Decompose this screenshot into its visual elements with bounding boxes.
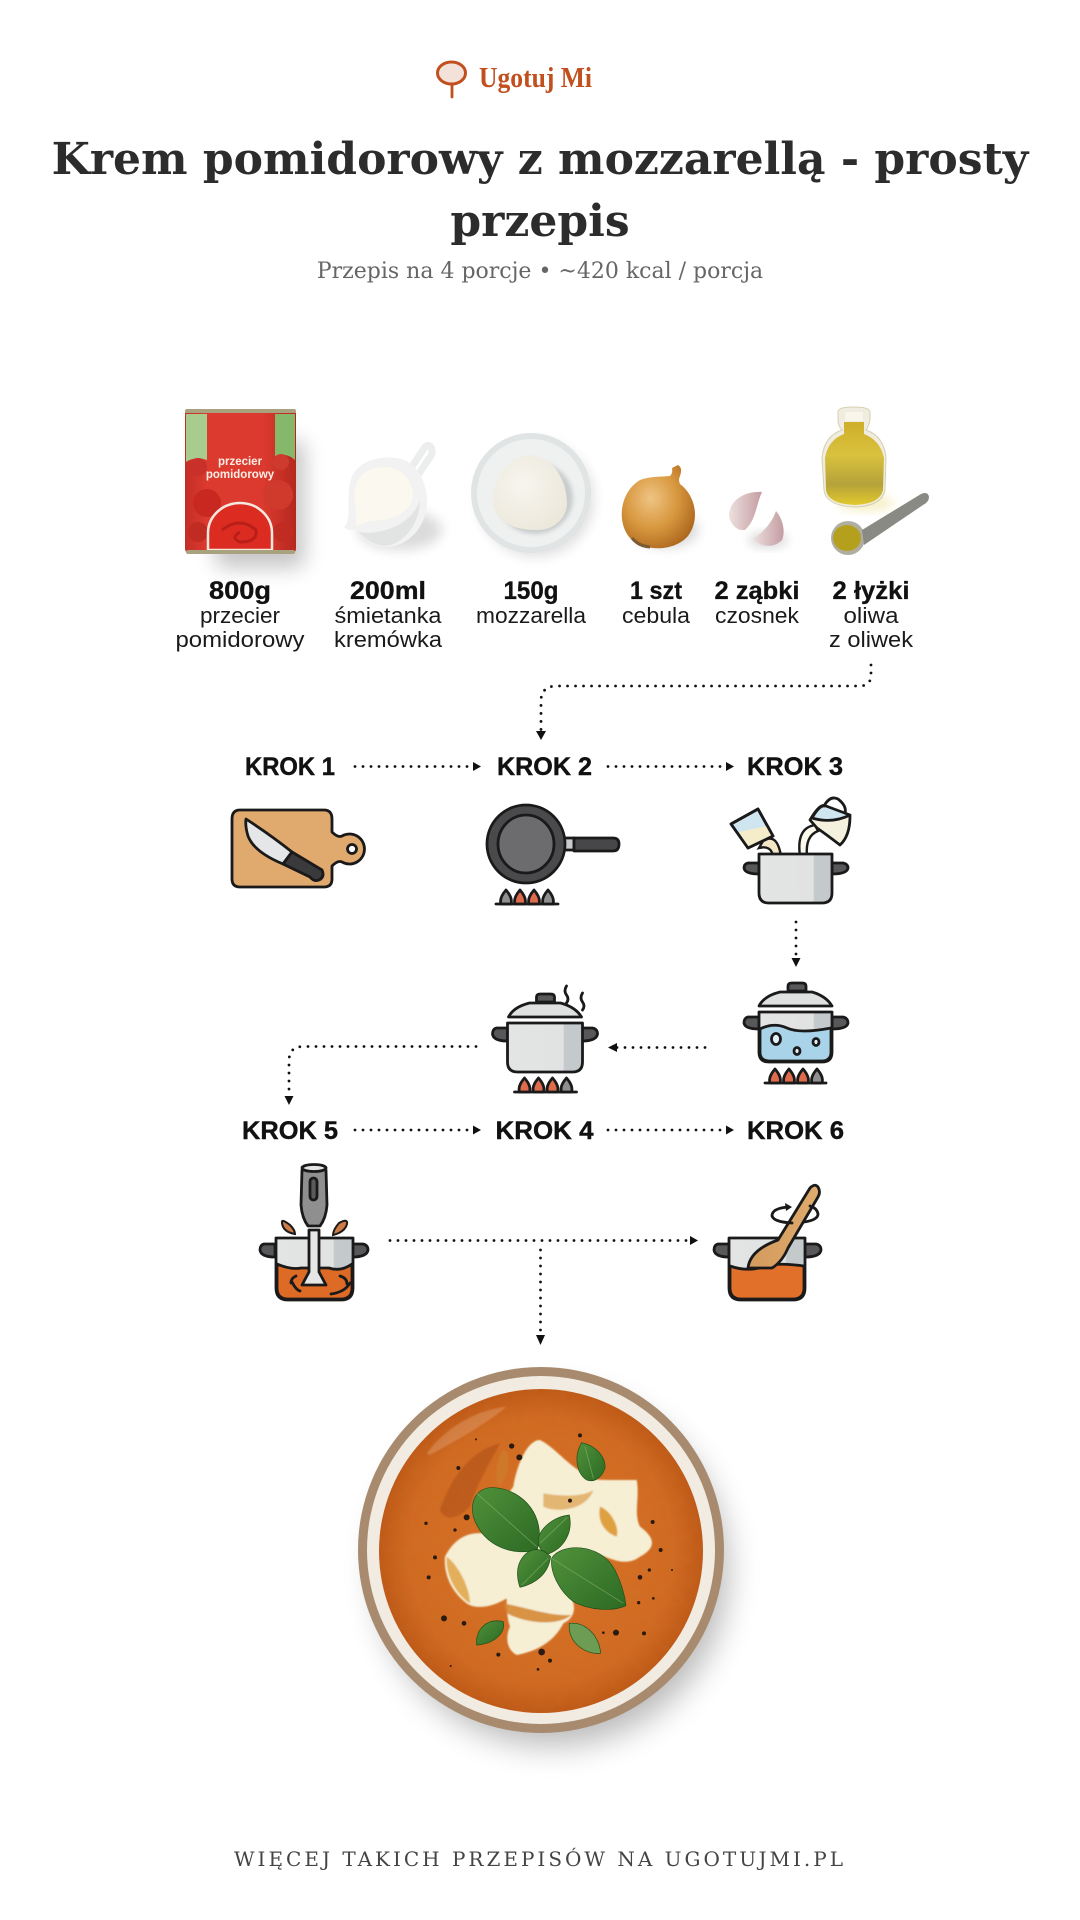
ingredient: onion xyxy=(622,465,698,548)
arrow: down to finished soup xyxy=(536,1250,545,1345)
icon: covered simmering pot xyxy=(492,986,598,1092)
arrow: step 4 to 6 xyxy=(608,1126,734,1134)
pot body xyxy=(744,863,848,874)
label: 2 ząbki: czosnek xyxy=(715,603,800,628)
mozzarella and basil xyxy=(424,1407,673,1671)
footer: WIĘCEJ TAKICH PRZEPISÓW NA UGOTUJMI.PL xyxy=(234,1846,846,1871)
ingredient: tomato passata can xyxy=(185,409,305,568)
ingredient: olive oil bottle and spoon xyxy=(822,407,929,555)
mozzarella xyxy=(445,1440,652,1655)
label: 800g: 800g xyxy=(209,577,271,605)
basil leaves xyxy=(472,1443,626,1653)
label: 1 szt: cebula xyxy=(622,603,691,628)
arrow: blender to stir pot xyxy=(390,1236,698,1245)
label: 150g xyxy=(476,577,587,628)
arrow: step 2 to 3 xyxy=(608,762,734,771)
arrow: simmer to step 5 xyxy=(284,1046,476,1105)
heading: KROK 3: KROK 3 xyxy=(747,753,843,781)
arrow: step 5 to 4 xyxy=(355,1126,481,1134)
ingredient: tomato passata can: przecier xyxy=(218,456,263,468)
heading: KROK 6: KROK 6 xyxy=(747,1117,844,1145)
burner flames xyxy=(496,890,558,904)
title: Krem pomidorowy z mozzarellą - prosty xyxy=(52,134,1030,185)
black pepper xyxy=(424,1433,673,1671)
heading: KROK 1: KROK 1 xyxy=(245,753,335,781)
label: 150g: mozzarella xyxy=(476,603,587,628)
ingredient labels xyxy=(176,577,914,652)
bowl shadow xyxy=(376,1394,728,1746)
heading: KROK 5: KROK 5 xyxy=(242,1117,338,1145)
burner flames xyxy=(514,1078,576,1092)
arrow: step 1 to 2 xyxy=(355,762,481,771)
label: 2 łyżki: z oliwek xyxy=(829,627,914,652)
label: 2 łyżki: 2 łyżki xyxy=(832,577,910,605)
ingredient: tomato passata can: pomidorowy xyxy=(206,469,275,481)
label: 2 łyżki: oliwa xyxy=(844,603,899,628)
logo wordmark: Ugotuj Mi xyxy=(479,62,592,94)
label: 1 szt: 1 szt xyxy=(630,577,683,605)
ingredient: mozzarella on plate xyxy=(471,433,594,557)
label: 2 łyżki xyxy=(829,577,914,652)
arrow: boiling to simmer xyxy=(608,1043,705,1052)
heading: KROK 2: KROK 2 xyxy=(497,753,592,781)
icon: cutting board with knife xyxy=(232,810,364,887)
heading: KROK 4: KROK 4 xyxy=(496,1117,594,1145)
label: 200ml: śmietanka xyxy=(334,603,442,628)
arrow: step 3 down to boiling xyxy=(792,922,800,967)
title: przepis xyxy=(450,196,630,247)
soup xyxy=(379,1389,703,1713)
finished soup bowl xyxy=(358,1367,728,1746)
label: 200ml xyxy=(334,577,443,652)
icon: boiling water pot xyxy=(744,983,848,1083)
label: 2 ząbki xyxy=(714,577,800,628)
arrow: ingredients to step 2 xyxy=(536,665,871,740)
label: 2 ząbki: 2 ząbki xyxy=(714,577,800,605)
pouring cup left xyxy=(731,809,773,848)
bowl rim xyxy=(358,1367,724,1733)
icon: immersion blender in pot xyxy=(260,1164,368,1300)
icon: frying pan on burner xyxy=(487,805,619,904)
burner flames xyxy=(765,1069,826,1083)
subtitle: Przepis na 4 porcje • ~420 kcal / porcja xyxy=(317,259,763,284)
logo: Ugotuj Mi xyxy=(438,62,592,97)
label: 800g xyxy=(176,577,304,652)
ingredient: garlic cloves xyxy=(729,492,788,548)
label: 1 szt xyxy=(622,577,691,628)
icon: pouring liquids into pot xyxy=(731,798,850,903)
ingredient: cream jug xyxy=(344,446,442,550)
pouring jug right xyxy=(810,798,850,845)
icon: pot with wooden spoon stirring xyxy=(714,1185,821,1300)
icon: spoon logo xyxy=(438,62,466,97)
label: 200ml: 200ml xyxy=(350,577,426,605)
label: 800g: przecier xyxy=(200,603,280,628)
label: 800g: pomidorowy xyxy=(176,627,304,652)
title xyxy=(52,134,1030,247)
label: 200ml: kremówka xyxy=(334,627,443,652)
label: 150g: 150g xyxy=(504,577,558,605)
